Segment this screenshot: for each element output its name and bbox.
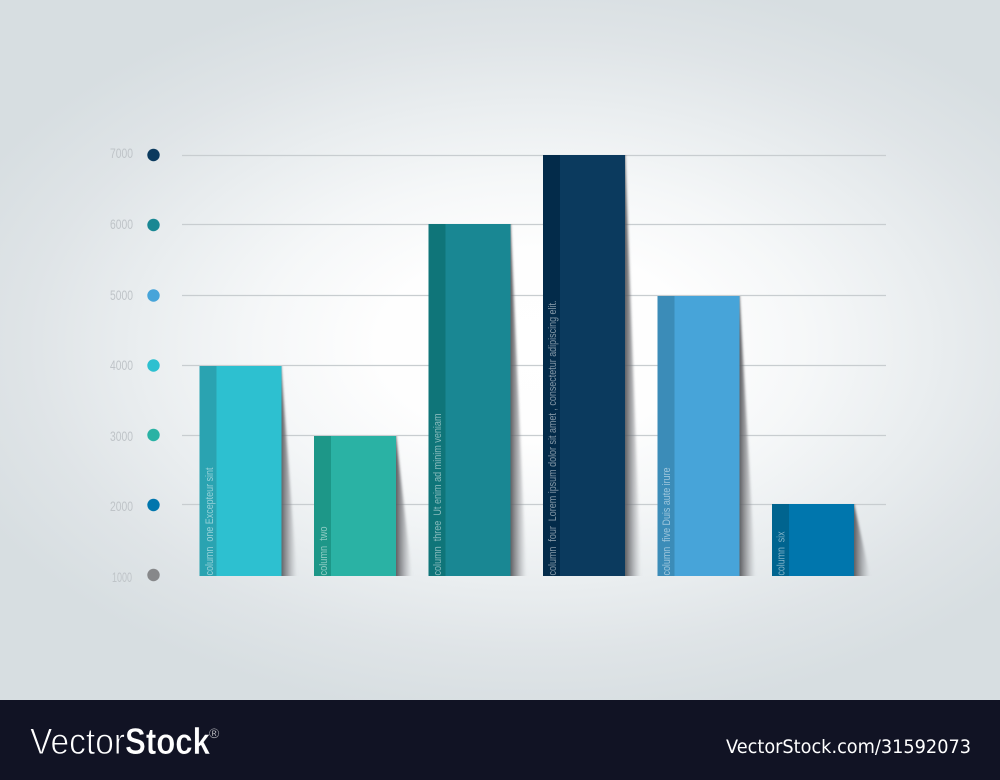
column three: column three Ut enim ad minim veniam — [432, 414, 444, 576]
footer logo: ® — [209, 725, 220, 741]
column four — [543, 155, 641, 576]
column four: column four Lorem ipsum dolor sit amet , consectetur adipiscing elit. — [547, 300, 559, 576]
y axis labels: 3000 — [110, 428, 133, 444]
column six — [772, 504, 870, 576]
column five: column five Duis aute irure — [661, 468, 673, 576]
y axis labels: 6000 — [110, 216, 133, 232]
footer logo: Vector — [30, 721, 125, 762]
column three — [428, 224, 526, 576]
column one: column one Excepteur sint — [204, 468, 216, 576]
footer logo — [30, 721, 220, 762]
footer bar — [0, 700, 1000, 780]
y axis labels: 7000 — [110, 145, 133, 161]
y axis labels: 5000 — [110, 287, 133, 303]
footer image id: VectorStock.com/31592073 — [726, 736, 971, 758]
y axis labels: 4000 — [110, 357, 133, 373]
chart gridlines — [182, 156, 886, 504]
legend dots — [147, 149, 160, 581]
column two: column two — [318, 526, 330, 576]
y axis labels: 2000 — [110, 498, 133, 514]
y axis labels: 1000 — [112, 569, 132, 585]
y axis labels — [110, 145, 133, 585]
column five — [658, 296, 756, 576]
column six: column six — [776, 531, 788, 576]
column two — [314, 436, 412, 576]
footer logo: Stock — [125, 721, 210, 762]
column one — [200, 366, 297, 576]
